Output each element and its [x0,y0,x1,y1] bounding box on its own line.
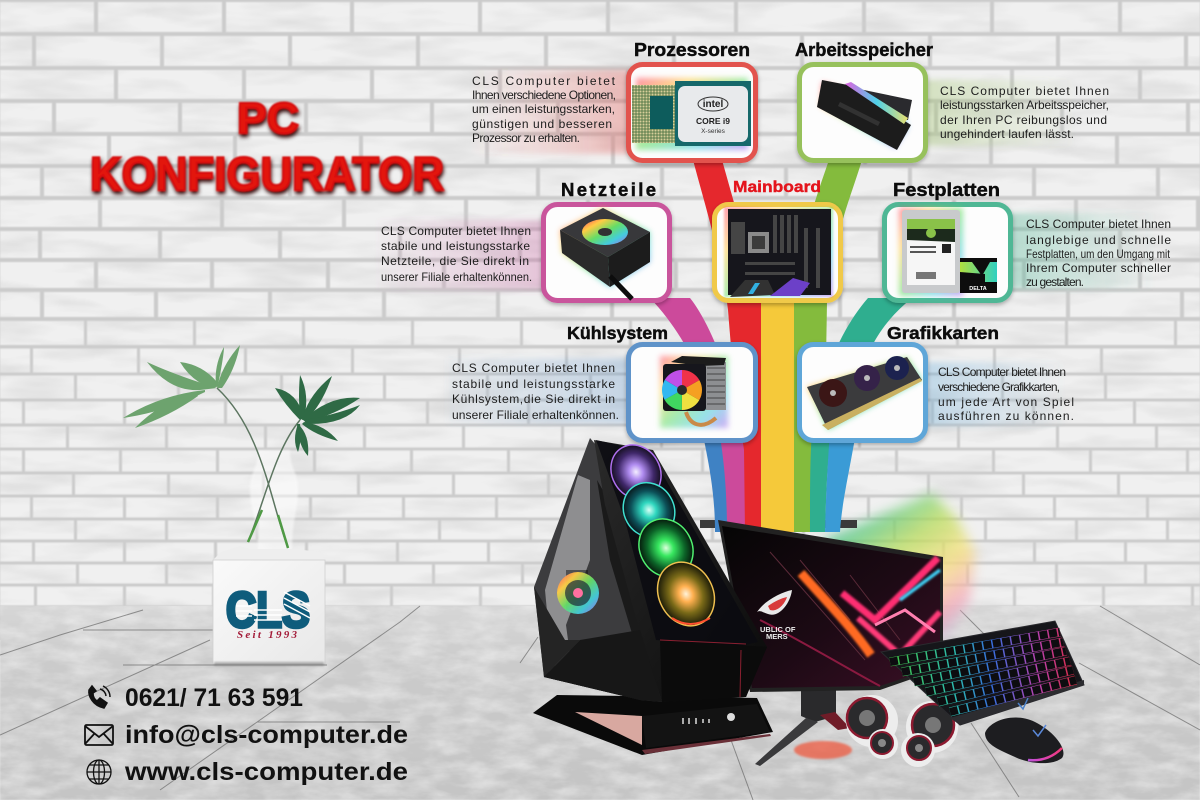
icon: phone [89,686,110,708]
icon: globe [87,760,111,784]
panel: Mainboard [714,204,840,300]
ribbon: red [693,160,762,532]
brick wall background [0,0,1200,640]
description [448,358,630,424]
description: günstigen und besseren [472,117,612,131]
ribbon: blue left [700,420,731,532]
monitor stand [755,690,852,766]
description [378,220,544,290]
description: Festplatten, um den Umgang mit [1026,247,1171,261]
image card: power supply [544,204,670,300]
description: verschiedene Grafikkarten, [938,380,1060,394]
description: unserer Filiale erhaltenkönnen. [381,270,532,284]
Seit 1993: Seit 1993 [237,629,298,641]
mouse [985,718,1063,763]
heading: Kühlsystem [567,323,668,343]
image card: CPU: CORE i9 [696,116,730,126]
title: PC [237,94,299,143]
description [925,362,1074,426]
description [1010,213,1171,289]
CLS logo: CLS [226,582,310,638]
image card: hard drive and SSD: DELTA [969,286,987,292]
description: CLS Computer bietet Ihnen [1026,217,1171,231]
contact block [85,684,408,786]
image card: CPU cooler [628,344,756,440]
phone number: 0621/ 71 63 591 [125,684,303,712]
description: langlebige und schnelle [1026,233,1171,247]
heading: Festplatten [893,179,1000,200]
description: unserer Filiale erhaltenkönnen. [452,408,619,422]
ribbon: teal [810,298,912,532]
description: um einen leistungsstarken, [472,102,615,116]
speakers [846,695,958,767]
image card: CPU: intel [703,99,723,110]
description [925,80,1109,146]
heading: Mainboard: Mainboard [733,179,821,196]
description: ausführen zu können. [938,409,1074,423]
description: Prozessor zu erhalten. [472,131,580,145]
monitor [718,520,943,692]
description: um jede Art von Spiel [938,395,1074,409]
logo cube planter [213,546,325,666]
plant leaves: dark [275,375,360,456]
case front panel [594,440,767,702]
hardware setup [533,436,1084,767]
description [470,70,630,154]
monitor brand text: UBLIC OF [760,625,796,634]
rainbow ribbons [650,160,912,532]
plant leaves: light [123,345,240,428]
heading: Prozessoren [634,39,750,60]
rainbow glow behind monitor [823,493,975,640]
image card: graphics card [800,344,926,440]
description: Ihrem Computer schneller [1026,261,1171,275]
ribbon: green [794,160,862,532]
description: Netzteile, die Sie direkt in [381,254,529,268]
plant stems [217,388,300,548]
ribbon: blue right [825,420,858,532]
panel: Grafikkarten [800,323,1074,440]
description: CLS Computer bietet [472,74,616,88]
title [90,94,444,200]
panel: Netzteile [378,179,670,300]
image card: CPU: X-series [701,128,726,135]
heading: Arbeitsspeicher [795,39,933,60]
monitor: MERS [766,632,788,641]
tiled floor [0,606,1200,800]
icon: envelope [85,725,113,745]
description: zu gestalten. [1026,275,1084,289]
panel: Arbeitsspeicher [795,39,1109,160]
description: CLS Computer bietet Ihnen [452,361,615,375]
plant vase [123,345,360,550]
email: info@cls-computer.de [125,721,408,749]
ribbon: magenta [650,298,745,532]
description: stabile und leistungsstarke [381,239,530,253]
case base [533,695,773,755]
shelf behind ribbons [700,520,857,528]
ribbon: yellow [761,295,794,532]
description: Kühlsystem,die Sie direkt in [452,392,615,406]
description: stabile und leistungsstarke [452,377,615,391]
panel: Prozessoren [470,39,756,160]
panel: Festplatten [884,179,1171,300]
case side panel [534,438,662,702]
description: CLS Computer bietet Ihnen [940,84,1109,98]
description: ungehindert laufen lässt. [940,127,1074,141]
ROG logo [757,590,792,615]
PC case [533,436,773,755]
description: Ihnen verschiedene Optionen, [472,88,616,102]
description: CLS Computer bietet Ihnen [938,365,1066,379]
image card: RAM [800,64,926,160]
panel: Kühlsystem [448,323,756,440]
fans [557,436,725,636]
description: der Ihren PC reibungslos und [940,113,1107,127]
keyboard [881,621,1084,725]
website: www.cls-computer.de [124,758,408,786]
image card: CPU [628,64,756,160]
title: KONFIGURATOR [90,147,444,200]
image card: hard drive and SSD [884,204,1010,300]
description: CLS Computer bietet Ihnen [381,224,531,238]
description: leistungsstarken Arbeitsspeicher, [940,98,1109,112]
heading: Grafikkarten [887,323,999,343]
heading: Netzteile [561,179,656,200]
